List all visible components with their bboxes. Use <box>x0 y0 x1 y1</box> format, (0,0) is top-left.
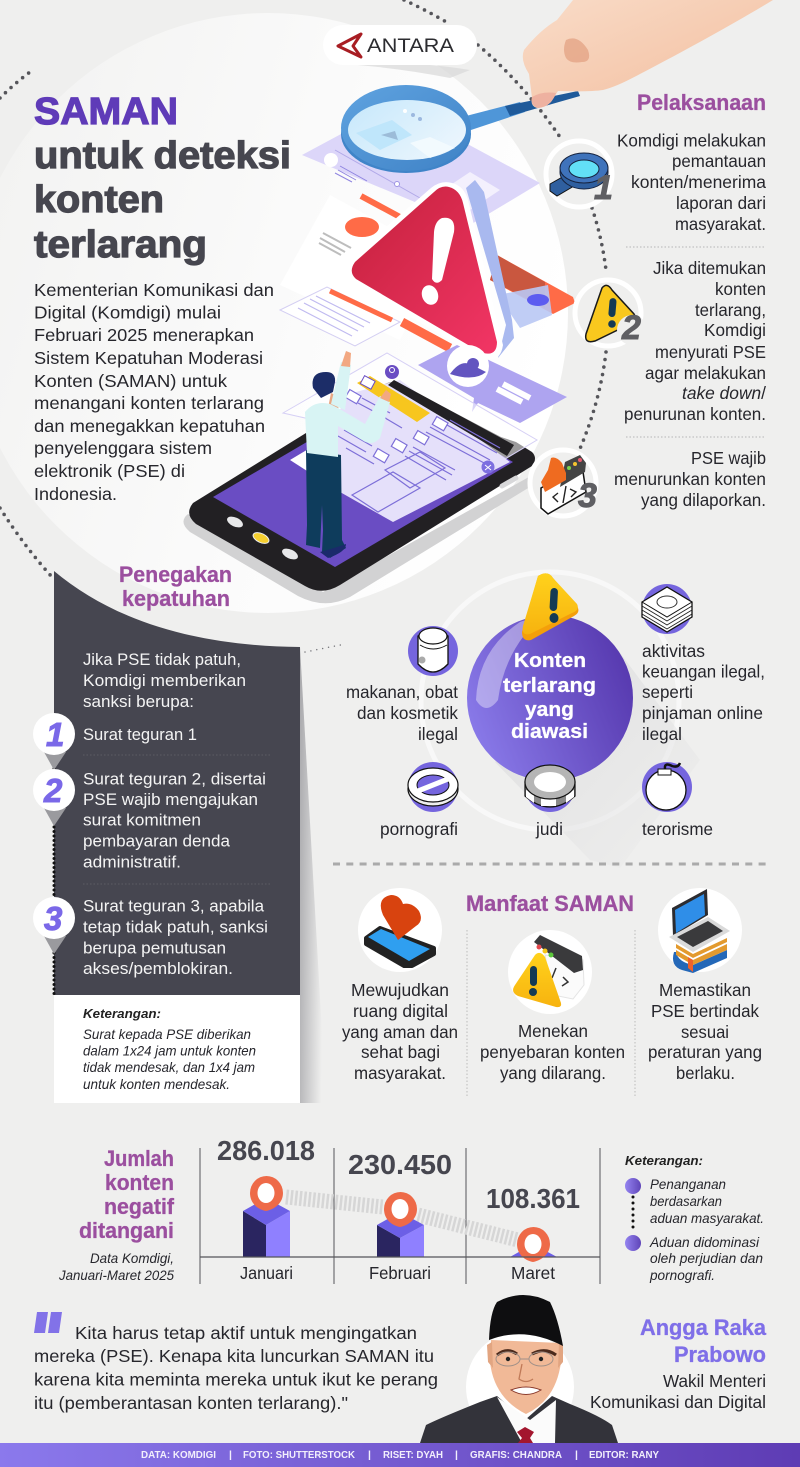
footer credits: FOTO: SHUTTERSTOCK <box>243 1449 355 1461</box>
keterangan box: Keterangan: <box>83 1006 161 1021</box>
benefit 1: Mewujudkan <box>351 980 449 1000</box>
dotted orbit path <box>0 0 606 577</box>
step 2 text: Komdigi <box>704 320 766 340</box>
central ball: Konten <box>514 649 586 672</box>
benefit 2: yang dilarang. <box>500 1063 606 1083</box>
step 1 text <box>617 130 766 234</box>
footer credits: EDITOR: RANY <box>589 1449 659 1461</box>
category: aktivitas keuangan ilegal: pinjaman online <box>642 703 763 723</box>
intro sanksi text <box>83 650 246 711</box>
keterangan box: dalam 1x24 jam untuk konten <box>83 1042 256 1058</box>
footer credits: | <box>455 1449 458 1461</box>
logo: ANTARA: ANTARA <box>367 36 454 57</box>
dotted spine <box>52 755 56 995</box>
blue arrow behind warning <box>466 180 514 358</box>
person name and role <box>590 1315 767 1412</box>
category: aktivitas keuangan ilegal: seperti <box>642 682 693 702</box>
sanction 1 text: Surat teguran 1 <box>83 725 197 744</box>
chart legend: aduan masyarakat. <box>650 1210 764 1226</box>
quote: itu (pemberantasan konten terlarang)." <box>34 1393 348 1413</box>
keterangan box: tidak mendesak, dan 1x4 jam <box>83 1059 255 1075</box>
red warning triangle <box>346 182 503 360</box>
panel: penegakan kepatuhan <box>54 571 300 995</box>
long shadow of ball <box>495 642 700 868</box>
number badge 2 <box>33 769 75 826</box>
step 1 text: masyarakat. <box>675 214 766 234</box>
step 2 text: konten <box>715 279 766 299</box>
benefit 1: sehat bagi <box>361 1042 440 1062</box>
benefit 3: PSE bertindak <box>651 1001 759 1021</box>
step 2 text: penurunan konten. <box>624 404 766 424</box>
benefit 3: sesuai <box>681 1022 729 1042</box>
central ball: terlarang <box>503 674 596 697</box>
small form card <box>280 287 450 348</box>
person name and role: Angga Raka <box>640 1315 767 1340</box>
top lavender web panel <box>302 105 540 225</box>
intro text: Digital (Komdigi) mulai <box>34 302 221 322</box>
sanction 3 text: Surat teguran 3, apabila <box>83 896 265 916</box>
number badge 1: 1 <box>46 716 64 753</box>
keterangan box: Surat kepada PSE diberikan <box>83 1026 251 1042</box>
intro text <box>34 280 274 504</box>
benefit 3 <box>648 888 762 1083</box>
benefit 2 <box>480 930 625 1083</box>
benefit 2: penyebaran konten <box>480 1042 625 1062</box>
benefit 1: ruang digital <box>353 1001 448 1021</box>
section heading: Pelaksanaan: Pelaksanaan <box>637 90 766 115</box>
chart legend: berdasarkan <box>650 1193 722 1209</box>
panel shadow <box>300 647 326 1103</box>
white document panel <box>280 195 440 340</box>
heading: Penegakan kepatuhan <box>119 562 232 611</box>
magnifying glass <box>341 85 580 173</box>
intro text: penyelenggara sistem <box>34 438 212 458</box>
sanction 2 text: administratif. <box>83 852 181 872</box>
footer credits: DATA: KOMDIGI <box>141 1449 216 1461</box>
keterangan box: untuk konten mendesak. <box>83 1076 230 1092</box>
step 3 text: yang dilaporkan. <box>641 490 766 510</box>
category: makanan, obat dan kosmetik: dan kosmetik <box>357 703 458 723</box>
background white disc <box>0 13 568 613</box>
hand <box>523 0 773 108</box>
step 2 text <box>624 258 766 424</box>
number badge 3: 3 <box>44 900 62 937</box>
footer credits: GRAFIS: CHANDRA <box>470 1449 562 1461</box>
title: terlarang <box>34 224 207 266</box>
footer credits: | <box>575 1449 578 1461</box>
category: pornografi: pornografi <box>380 819 458 839</box>
benefit 1: yang aman dan <box>342 1022 458 1042</box>
category: aktivitas keuangan ilegal: aktivitas <box>642 641 705 661</box>
step icon 1: magnifier: 1 <box>594 169 613 207</box>
step 2 text: terlarang, <box>695 300 766 320</box>
sanction 3 text: akses/pemblokiran. <box>83 959 233 978</box>
heading: Jumlah konten negatif ditangani: konten <box>105 1170 174 1195</box>
person name and role: Prabowo <box>674 1342 766 1367</box>
heading: Penegakan kepatuhan: kepatuhan <box>122 586 230 611</box>
step 1 text: konten/menerima <box>631 172 766 192</box>
step 2 text: agar melakukan <box>645 363 766 383</box>
bar chart <box>200 1135 600 1284</box>
intro sanksi text: Komdigi memberikan <box>83 671 246 690</box>
intro sanksi text: sanksi berupa: <box>83 692 194 711</box>
chart legend: Penanganan <box>650 1176 726 1192</box>
bar: Februari <box>348 1149 452 1283</box>
sanction 3 text: tetap tidak patuh, sanksi <box>83 918 268 936</box>
footer credits: | <box>368 1449 371 1461</box>
step 3 text <box>614 448 766 510</box>
sanction 3 text <box>83 896 268 978</box>
phone shadow <box>183 468 545 603</box>
step 2 text: take down/ <box>682 383 766 403</box>
central ball <box>467 615 633 781</box>
step icon 2: warning <box>575 280 647 347</box>
step 3 text: PSE wajib <box>691 448 766 468</box>
sanction 2 text: surat komitmen <box>83 810 201 830</box>
sanction 2 text: pembayaran denda <box>83 832 231 850</box>
trend connector <box>286 1197 518 1240</box>
category: judi <box>525 762 575 839</box>
warning icon on ball <box>522 573 578 640</box>
bar: Januari <box>217 1135 315 1283</box>
intro text: menangani konten terlarang <box>34 393 264 413</box>
quote mark <box>34 1312 62 1333</box>
screen white block <box>290 442 345 490</box>
step 2 text: menyurati PSE <box>655 342 766 362</box>
chart legend: pornografi. <box>649 1267 715 1283</box>
benefit 3: peraturan yang <box>648 1042 762 1062</box>
intro text: dan menegakkan kepatuhan <box>34 416 265 436</box>
number badge 1 <box>33 713 75 770</box>
step icon 2: warning: 2 <box>621 309 641 347</box>
intro text: Februari 2025 menerapkan <box>34 325 254 345</box>
faint dotted link <box>305 644 345 652</box>
sanction 2 text: Surat teguran 2, disertai <box>83 770 266 788</box>
title: SAMAN <box>34 91 178 133</box>
keterangan box <box>54 995 300 1103</box>
chart legend: oleh perjudian dan <box>650 1250 763 1266</box>
step 1 text: Komdigi melakukan <box>617 130 766 150</box>
logo: ANTARA <box>323 25 477 78</box>
category: makanan, obat dan kosmetik: ilegal <box>418 724 458 744</box>
category: makanan, obat dan kosmetik: makanan, obat <box>346 682 458 702</box>
intro text: Indonesia. <box>34 484 117 504</box>
bar: Februari: 230.450 <box>348 1149 452 1180</box>
bar: Januari: 286.018 <box>217 1135 315 1166</box>
heading: Jumlah konten negatif ditangani: Januari-Maret 2025 <box>58 1267 174 1283</box>
phone body <box>189 382 535 591</box>
benefit 3: berlaku. <box>676 1063 735 1083</box>
bar: Maret: Maret <box>511 1263 555 1283</box>
quote: mereka (PSE). Kenapa kita luncurkan SAMAN itu <box>34 1346 434 1366</box>
intro text: elektronik (PSE) di <box>34 461 185 481</box>
chart legend <box>625 1153 764 1283</box>
intro sanksi text: Jika PSE tidak patuh, <box>83 650 241 669</box>
step 1 text: laporan dari <box>676 193 766 213</box>
central ball: diawasi <box>511 720 588 743</box>
floating form panel <box>283 353 537 522</box>
heading: Jumlah konten negatif ditangani: Data Komdigi, <box>90 1250 174 1266</box>
step icon 1: magnifier <box>546 141 613 207</box>
chart legend: Keterangan: <box>625 1153 703 1168</box>
category: terorisme: terorisme <box>642 819 713 839</box>
category: judi: judi <box>535 819 563 839</box>
phone screen <box>213 392 513 567</box>
title: konten <box>34 179 164 221</box>
category: aktivitas keuangan ilegal: keuangan ilegal, <box>642 662 765 682</box>
chart legend: Aduan didominasi <box>649 1234 760 1250</box>
quote <box>34 1312 438 1413</box>
person name and role: Komunikasi dan Digital <box>590 1392 766 1412</box>
sanction 2 text: PSE wajib mengajukan <box>83 790 258 809</box>
bar: Januari: Januari <box>240 1263 293 1283</box>
intro text: Kementerian Komunikasi dan <box>34 280 274 300</box>
number badge 3 <box>33 897 75 954</box>
portrait: Angga Raka Prabowo <box>420 1295 618 1443</box>
title <box>34 91 291 266</box>
step 1 text: pemantauan <box>672 151 766 171</box>
step 2 text: Jika ditemukan <box>653 258 766 278</box>
step icon 3: code window <box>530 450 597 516</box>
footer credits <box>0 1443 800 1467</box>
heading: Penegakan kepatuhan: Penegakan <box>119 562 232 587</box>
heading: Jumlah konten negatif ditangani: ditangani <box>79 1218 174 1243</box>
heading: Jumlah konten negatif ditangani <box>58 1146 175 1283</box>
intro text: Sistem Kepatuhan Moderasi <box>34 348 263 368</box>
title: untuk deteksi <box>34 135 291 177</box>
category: terorisme <box>642 762 713 839</box>
heading: Jumlah konten negatif ditangani: negatif <box>104 1194 175 1219</box>
bar: Maret <box>486 1183 580 1283</box>
heading: Jumlah konten negatif ditangani: Jumlah <box>104 1146 174 1171</box>
category: pornografi <box>380 762 458 839</box>
quote: Kita harus tetap aktif untuk mengingatkan <box>75 1323 417 1343</box>
category: makanan, obat dan kosmetik <box>346 626 458 744</box>
heading: Manfaat SAMAN: Manfaat SAMAN <box>466 891 634 916</box>
sanction 3 text: berupa pemutusan <box>83 938 226 958</box>
footer credits: RISET: DYAH <box>383 1449 443 1461</box>
benefit 3: Memastikan <box>659 980 751 1000</box>
quote: karena kita meminta mereka untuk ikut ke perang <box>34 1370 438 1390</box>
bar: Februari: Februari <box>369 1263 431 1283</box>
speech bubble <box>418 345 567 423</box>
bar: Maret: 108.361 <box>486 1183 580 1214</box>
benefit 1: masyarakat. <box>354 1063 446 1083</box>
footer credits: | <box>229 1449 232 1461</box>
benefit 2: Menekan <box>518 1021 588 1041</box>
person <box>305 351 391 558</box>
person name and role: Wakil Menteri <box>663 1371 766 1391</box>
benefit 1 <box>342 888 458 1083</box>
step icon 3: code window: 3 <box>578 477 597 515</box>
number badge 2: 2 <box>43 772 63 809</box>
category: aktivitas keuangan ilegal <box>642 584 765 744</box>
orange bar with blue block <box>490 255 575 328</box>
step 3 text: menurunkan konten <box>614 469 766 489</box>
sanction 2 text <box>83 770 266 872</box>
category: aktivitas keuangan ilegal: ilegal <box>642 724 682 744</box>
central ball: yang <box>525 698 574 721</box>
faint ring <box>421 572 679 830</box>
phone buttons <box>225 478 516 562</box>
main isometric illustration <box>183 0 773 603</box>
intro text: Konten (SAMAN) untuk <box>34 371 227 391</box>
